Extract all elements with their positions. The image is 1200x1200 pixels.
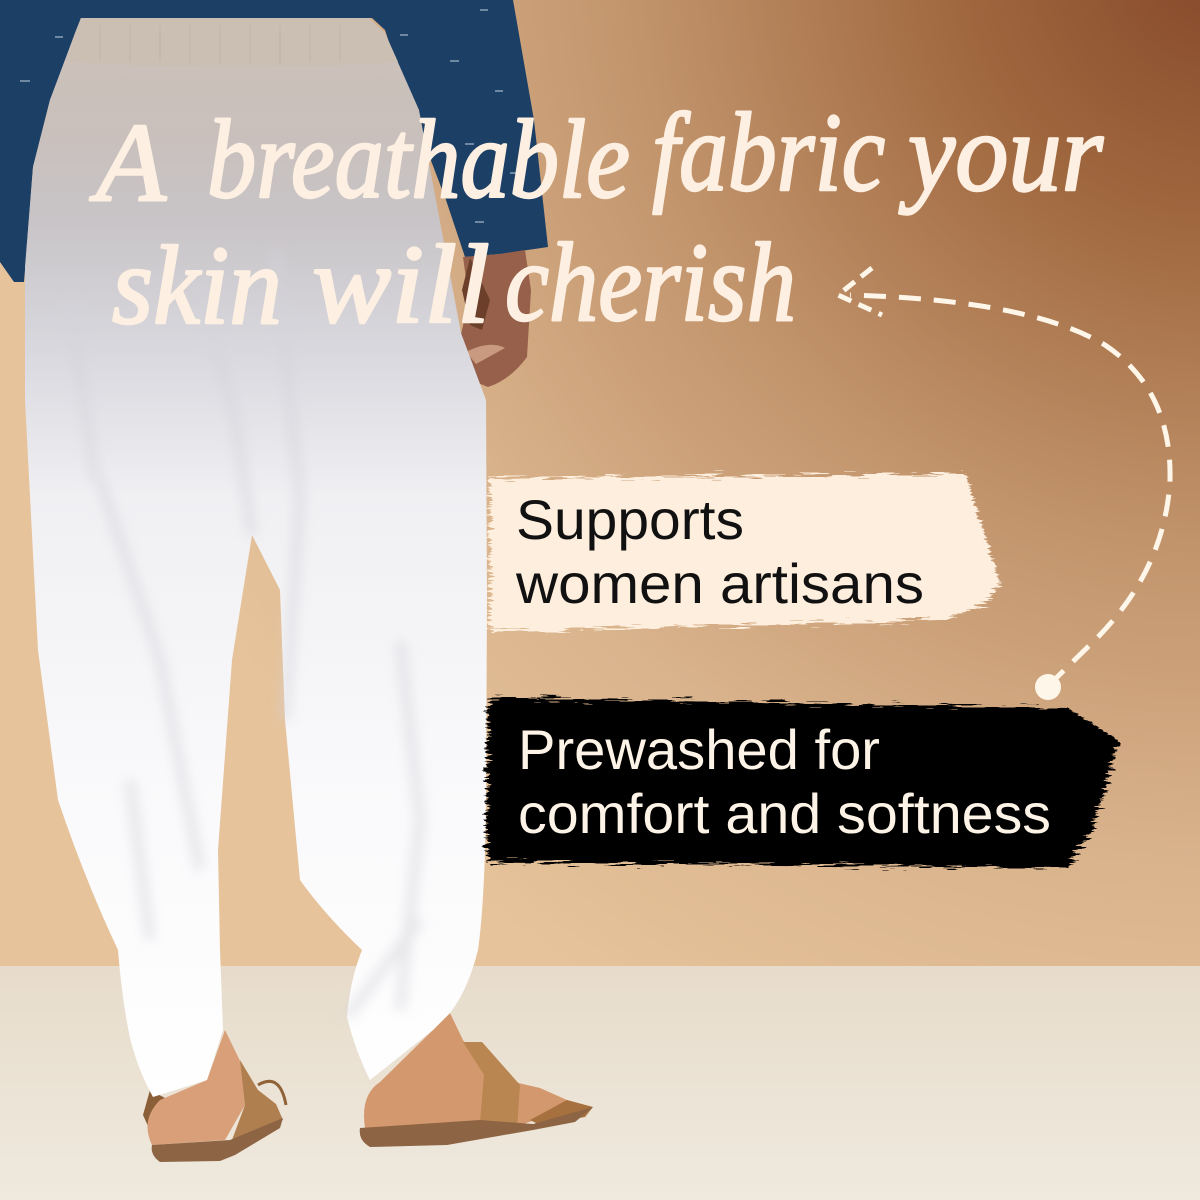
figure: person from behind in white dhoti pants bbox=[0, 0, 593, 1162]
title: breathable bbox=[207, 98, 630, 222]
waistband bbox=[68, 18, 398, 67]
title: fabric bbox=[652, 91, 885, 215]
title: your bbox=[899, 91, 1103, 215]
callout: prewashed for comfort and softness bbox=[486, 697, 1118, 868]
left sandal and foot bbox=[143, 1030, 286, 1162]
callout: prewashed for comfort and softness: comfort and softness bbox=[518, 782, 1051, 845]
arrow: dashed curve from black banner to title bbox=[838, 268, 1170, 700]
hand bbox=[458, 250, 531, 387]
shirt bbox=[0, 0, 548, 282]
title: will bbox=[312, 223, 490, 347]
callout: supports women artisans bbox=[490, 474, 1000, 632]
floor bbox=[0, 966, 1200, 1200]
title bbox=[89, 91, 1103, 348]
title: skin bbox=[112, 224, 282, 348]
callout: supports women artisans: women artisans bbox=[515, 552, 924, 615]
title: cherish bbox=[505, 221, 796, 345]
pants bbox=[25, 18, 487, 1097]
title: A bbox=[89, 101, 167, 225]
callout: supports women artisans: Supports bbox=[516, 488, 744, 551]
callout: prewashed for comfort and softness: Prewashed for bbox=[518, 718, 880, 781]
fold shadows bbox=[70, 250, 420, 1017]
right sandal and foot bbox=[360, 1013, 593, 1147]
